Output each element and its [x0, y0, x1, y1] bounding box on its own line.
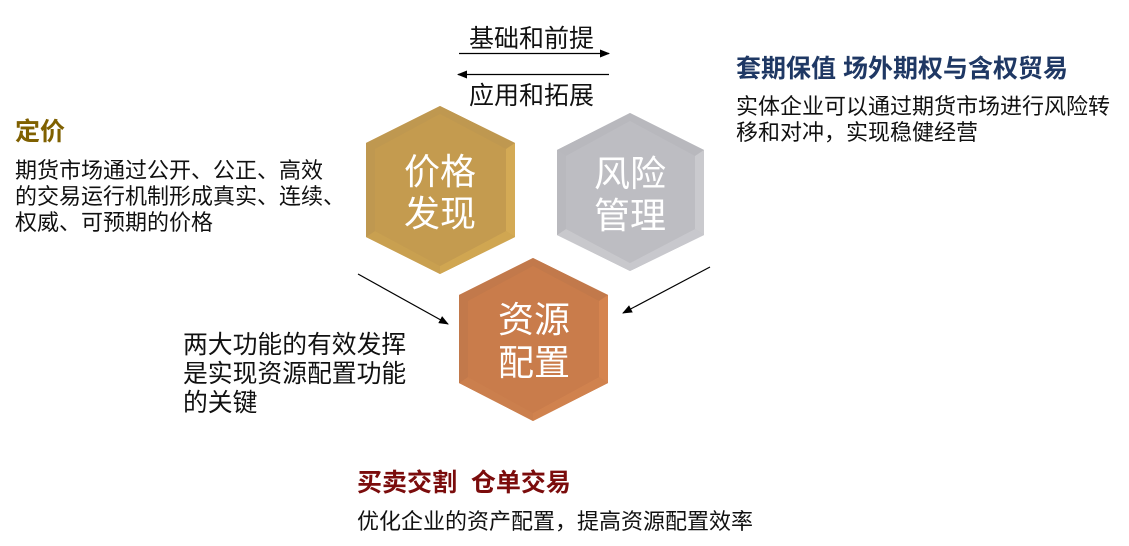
text: 两大功能: 是实现资源配置功能	[183, 361, 406, 388]
hexagon: 价格发现	[366, 106, 515, 274]
text: 买卖交割说明: 优化企业的资产配置，提高资源配置效率	[357, 509, 753, 534]
label: 应用和拓展: 应用和拓展	[469, 82, 594, 110]
text: 定价说明: 权威、可预期的价格	[15, 210, 213, 235]
heading: 买卖交割: 买卖交割 仓单交易	[357, 469, 571, 497]
panel: 买卖交割	[357, 469, 753, 534]
label: 基础和前提: 基础和前提	[469, 25, 594, 53]
text: 定价说明: 期货市场通过公开、公正、高效	[15, 158, 323, 183]
text: 两大功能	[183, 332, 406, 417]
text: 套期保值说明: 实体企业可以通过期货市场进行风险转	[736, 94, 1110, 119]
label: 价格发现: 价格	[404, 151, 476, 192]
arrow: 价格发现 to 资源配置	[358, 274, 448, 324]
arrow: 应用和拓展	[458, 74, 609, 76]
text: 两大功能: 的关键	[183, 390, 257, 417]
text: 套期保值说明	[736, 94, 1110, 145]
heading: 定价: 定价	[15, 118, 65, 146]
text: 定价说明: 的交易运行机制形成真实、连续、	[15, 184, 345, 209]
hexagon: 资源配置: 配置	[498, 342, 570, 383]
panel: 套期保值	[736, 55, 1110, 145]
panel: 定价	[15, 118, 345, 235]
hexagon: 价格发现: 发现	[404, 193, 476, 234]
text: 定价说明	[15, 158, 345, 235]
arrow: 风险管理 to 资源配置	[623, 267, 710, 313]
label: 风险管理: 风险	[594, 153, 666, 194]
label: 资源配置: 资源	[498, 299, 570, 340]
heading: 套期保值: 套期保值 场外期权与含权贸易	[736, 55, 1068, 83]
text: 两大功能: 两大功能的有效发挥	[183, 332, 406, 359]
hexagon: 风险管理	[557, 113, 704, 271]
text: 套期保值说明: 移和对冲，实现稳健经营	[736, 120, 978, 145]
hexagon: 风险管理: 管理	[594, 195, 666, 236]
hexagon: 资源配置	[459, 258, 608, 421]
arrow: 基础和前提	[459, 52, 609, 54]
